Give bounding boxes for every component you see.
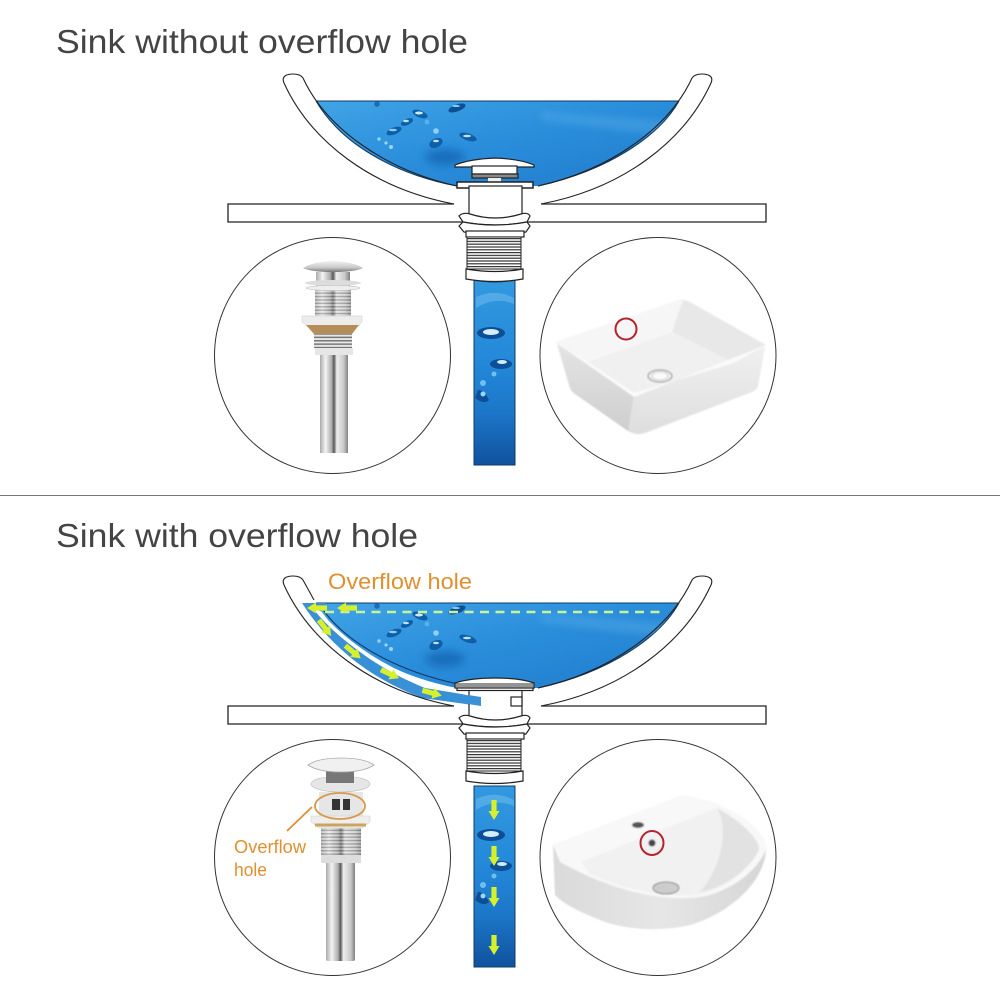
drain pipe water with arrows (474, 786, 515, 967)
circle: round sink (540, 740, 776, 976)
channel through fitting (468, 695, 481, 706)
diagram: sink with overflow (228, 576, 766, 967)
divider (0, 494, 1000, 496)
red marker circle (640, 831, 664, 855)
overflow channel (302, 603, 480, 706)
flow arrows (307, 602, 443, 701)
dashed overflow level (325, 611, 666, 613)
basin outline (283, 74, 712, 204)
countertop (228, 204, 766, 222)
water in basin (316, 603, 679, 688)
drain fitting (455, 678, 534, 784)
sink photo (553, 795, 766, 929)
drain pipe water (474, 280, 515, 465)
overflow hole ring (315, 793, 365, 819)
sink photo (555, 299, 766, 434)
water in basin (316, 101, 679, 186)
leader line (287, 807, 312, 831)
heading: sink without overflow hole: Sink without overflow hole (56, 23, 468, 60)
countertop (228, 706, 766, 724)
red marker circle (616, 318, 636, 340)
chrome drain photo (302, 261, 363, 453)
circle: drain with overflow (214, 740, 450, 976)
chrome drain photo (308, 758, 374, 961)
diagram: sink without overflow (228, 74, 766, 465)
circle: rectangular sink (540, 238, 776, 474)
heading: sink with overflow hole: Sink with overflow hole (56, 517, 418, 554)
label: overflow hole: Overflow hole (328, 569, 472, 594)
circle: drain without overflow (214, 238, 450, 474)
drain fitting (455, 158, 534, 282)
label: overflow hole: hole (234, 860, 267, 880)
basin outline (283, 576, 712, 706)
label: overflow hole: Overflow (234, 837, 307, 857)
